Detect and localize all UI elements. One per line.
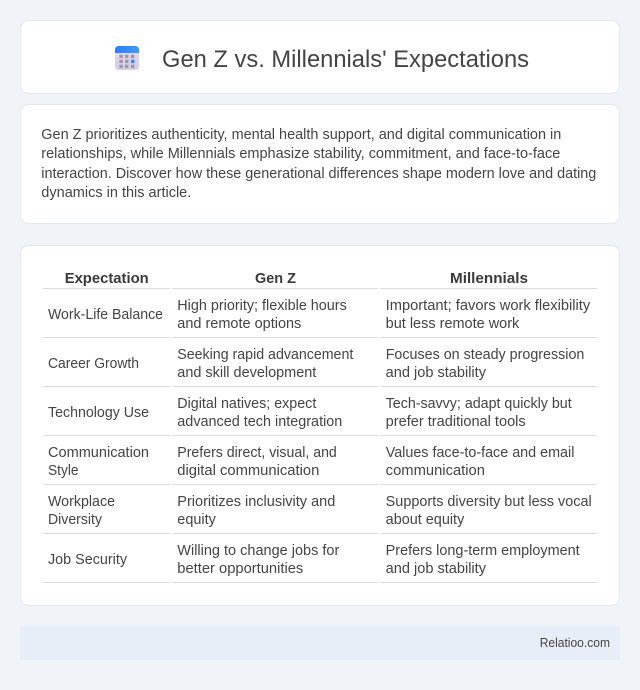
- text block: introduction paragraph: dynamics in this article.: [41, 185, 191, 201]
- row: work-life balance: Work-Life Balance: [48, 307, 163, 323]
- row: workplace diversity: Prioritizes inclusivity and: [177, 494, 335, 510]
- text block: introduction paragraph: Gen Z prioritizes authenticity, mental health support, and digital communication in: [41, 127, 561, 143]
- row: communication style: Communication: [48, 445, 149, 461]
- row: career growth: Career Growth: [48, 356, 139, 372]
- table header: Expectation: [65, 270, 149, 287]
- footer: [20, 626, 620, 660]
- text block: introduction paragraph: interaction. Discover how these generational differences shape modern love and dating: [41, 166, 596, 182]
- panel: comparison table: [20, 246, 620, 606]
- row: communication style: communication: [386, 463, 485, 479]
- row: career growth: Focuses on steady progression: [386, 347, 584, 363]
- row: communication style: digital communication: [177, 463, 319, 479]
- row: work-life balance: Important; favors work flexibility: [386, 298, 591, 314]
- row: technology use: Digital natives; expect: [177, 396, 316, 412]
- row: workplace diversity: equity: [177, 512, 217, 528]
- row: technology use: Tech-savvy; adapt quickly but: [386, 396, 572, 412]
- footer credit: Relatioo.com: [540, 636, 610, 650]
- title: Gen Z vs. Millennials' Expectations: [162, 46, 529, 73]
- icon: calendar: [115, 46, 139, 70]
- row: communication style: [48, 445, 574, 479]
- row: work-life balance: and remote options: [177, 316, 301, 332]
- row: communication style: Values face-to-face and email: [386, 445, 574, 461]
- row: technology use: prefer traditional tools: [386, 414, 526, 430]
- row: job security: and job stability: [386, 561, 487, 577]
- row: work-life balance: High priority; flexible hours: [177, 298, 347, 314]
- row: technology use: advanced tech integration: [177, 414, 342, 430]
- row: communication style: Style: [48, 463, 78, 479]
- row: job security: Willing to change jobs for: [177, 543, 340, 559]
- panel: introduction: [20, 104, 620, 224]
- row: workplace diversity: Supports diversity but less vocal: [386, 494, 592, 510]
- row: job security: better opportunities: [177, 561, 303, 577]
- table header: Gen Z: [255, 270, 296, 287]
- row: career growth: [48, 347, 584, 381]
- row: career growth: and skill development: [177, 365, 316, 381]
- row: workplace diversity: Workplace: [48, 494, 115, 510]
- table header: Millennials: [450, 270, 528, 287]
- text block: introduction paragraph: [41, 127, 596, 201]
- row: workplace diversity: Diversity: [48, 512, 103, 528]
- table header: [65, 270, 528, 287]
- panel: title card: [20, 20, 620, 94]
- row: job security: Job Security: [48, 552, 128, 568]
- row: job security: [48, 543, 580, 577]
- row: workplace diversity: about equity: [386, 512, 465, 528]
- row: communication style: Prefers direct, visual, and: [177, 445, 337, 461]
- row: work-life balance: [48, 298, 591, 332]
- row: work-life balance: but less remote work: [386, 316, 520, 332]
- row: career growth: and job stability: [386, 365, 487, 381]
- row: technology use: Technology Use: [48, 405, 149, 421]
- row: career growth: Seeking rapid advancement: [177, 347, 353, 363]
- text block: introduction paragraph: relationships, while Millennials emphasize stability, commitment, and face-to-face: [41, 146, 560, 162]
- row: job security: Prefers long-term employment: [386, 543, 580, 559]
- row: workplace diversity: [48, 494, 592, 528]
- row: technology use: [48, 396, 572, 430]
